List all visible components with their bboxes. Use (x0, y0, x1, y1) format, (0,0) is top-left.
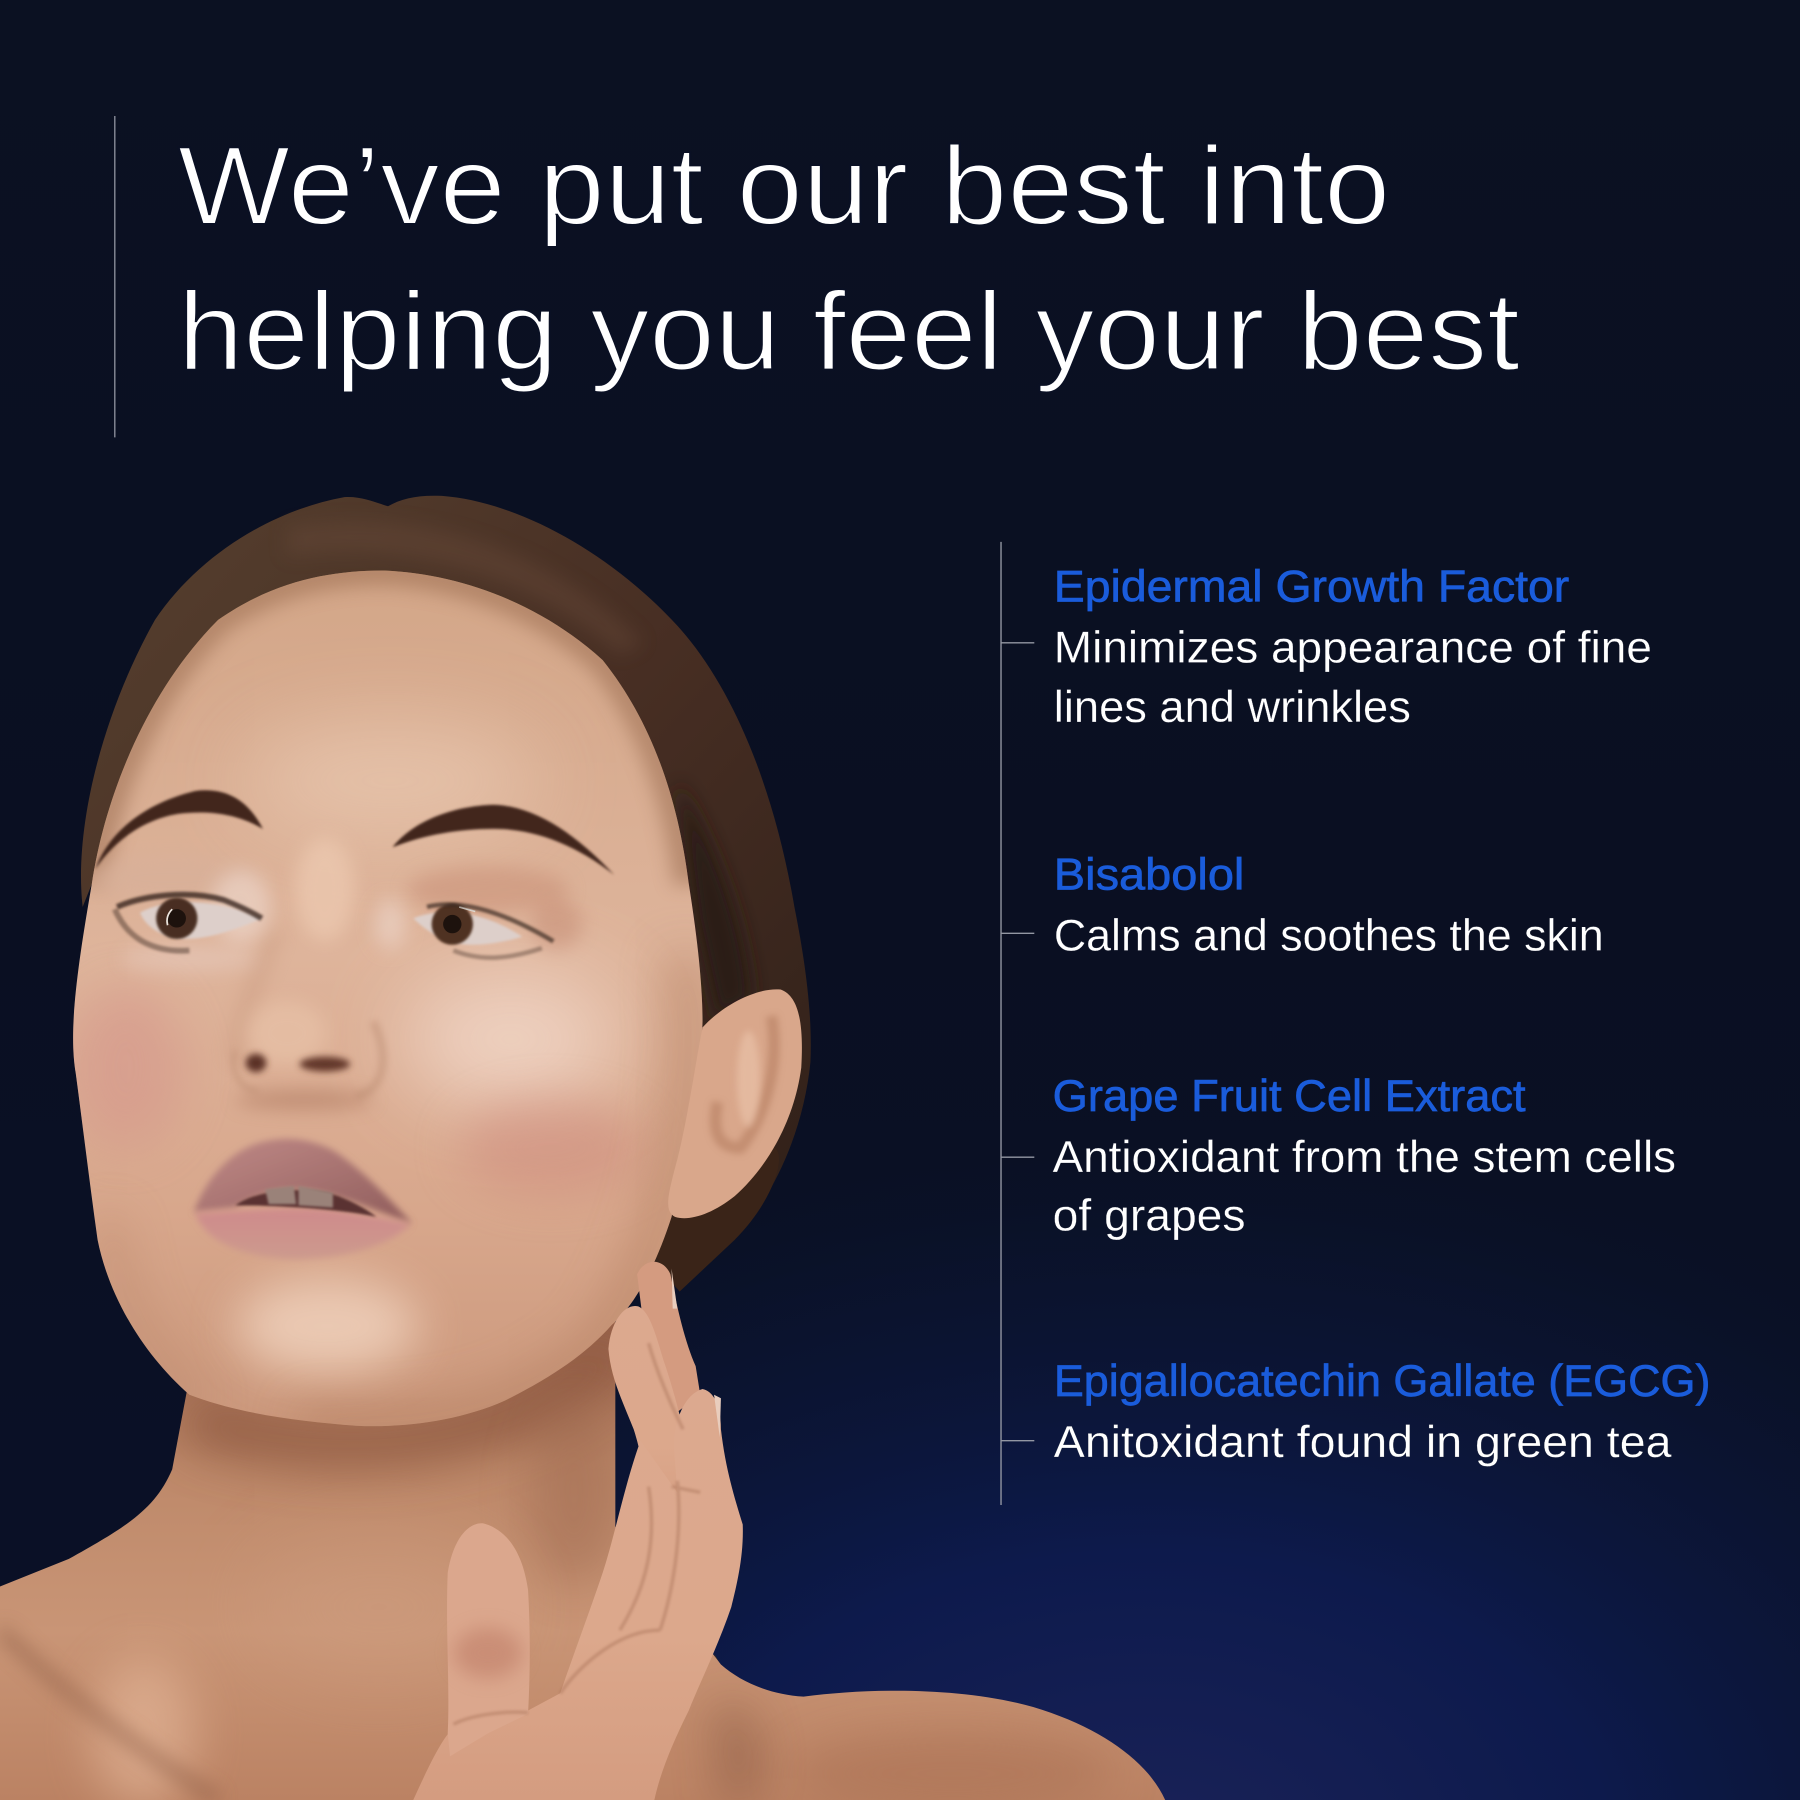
ingredient 3 (1053, 1071, 1676, 1241)
ingredient 3: of grapes (1053, 1191, 1246, 1241)
left eyebrow (95, 790, 263, 869)
ingredient 4: Epigallocatechin Gallate (EGCG) (1054, 1356, 1710, 1406)
right eyebrow (393, 805, 614, 875)
ingredient list (1001, 542, 1710, 1505)
ingredient 4: Anitoxidant found in green tea (1054, 1417, 1672, 1467)
lips (194, 1139, 412, 1259)
fingertip nails (672, 1268, 721, 1437)
title line 1: We’ve put our best into (178, 123, 1390, 248)
middle finger (608, 1306, 689, 1538)
right eye (413, 903, 553, 958)
ingredient 4 (1054, 1356, 1710, 1467)
thumb knuckle (453, 1628, 522, 1678)
hair (81, 496, 811, 1678)
hand (413, 1262, 743, 1800)
ingredient 1: Epidermal Growth Factor (1054, 562, 1569, 612)
ingredient 1: lines and wrinkles (1054, 682, 1411, 732)
ear (668, 989, 802, 1218)
finger creases (453, 1343, 700, 1724)
ingredient 2: Calms and soothes the skin (1054, 911, 1604, 961)
ingredient 3: Antioxidant from the stem cells (1053, 1132, 1676, 1182)
left eye (115, 895, 262, 951)
title block (115, 116, 1520, 437)
thumb (447, 1523, 530, 1756)
neck and shoulders (0, 1320, 1165, 1800)
ingredient connector lines (1001, 542, 1034, 1505)
nose (234, 1001, 383, 1109)
portrait of woman (0, 496, 1165, 1800)
face (69, 571, 703, 1427)
back finger (637, 1262, 700, 1412)
ingredient 3: Grape Fruit Cell Extract (1053, 1071, 1526, 1121)
ingredient 1 (1054, 562, 1652, 732)
ingredient 2 (1054, 850, 1604, 961)
ingredient 2: Bisabolol (1054, 850, 1244, 900)
palm and front finger (413, 1389, 743, 1800)
title line 2: helping you feel your best (178, 269, 1520, 394)
ingredient 1: Minimizes appearance of fine (1054, 622, 1652, 672)
